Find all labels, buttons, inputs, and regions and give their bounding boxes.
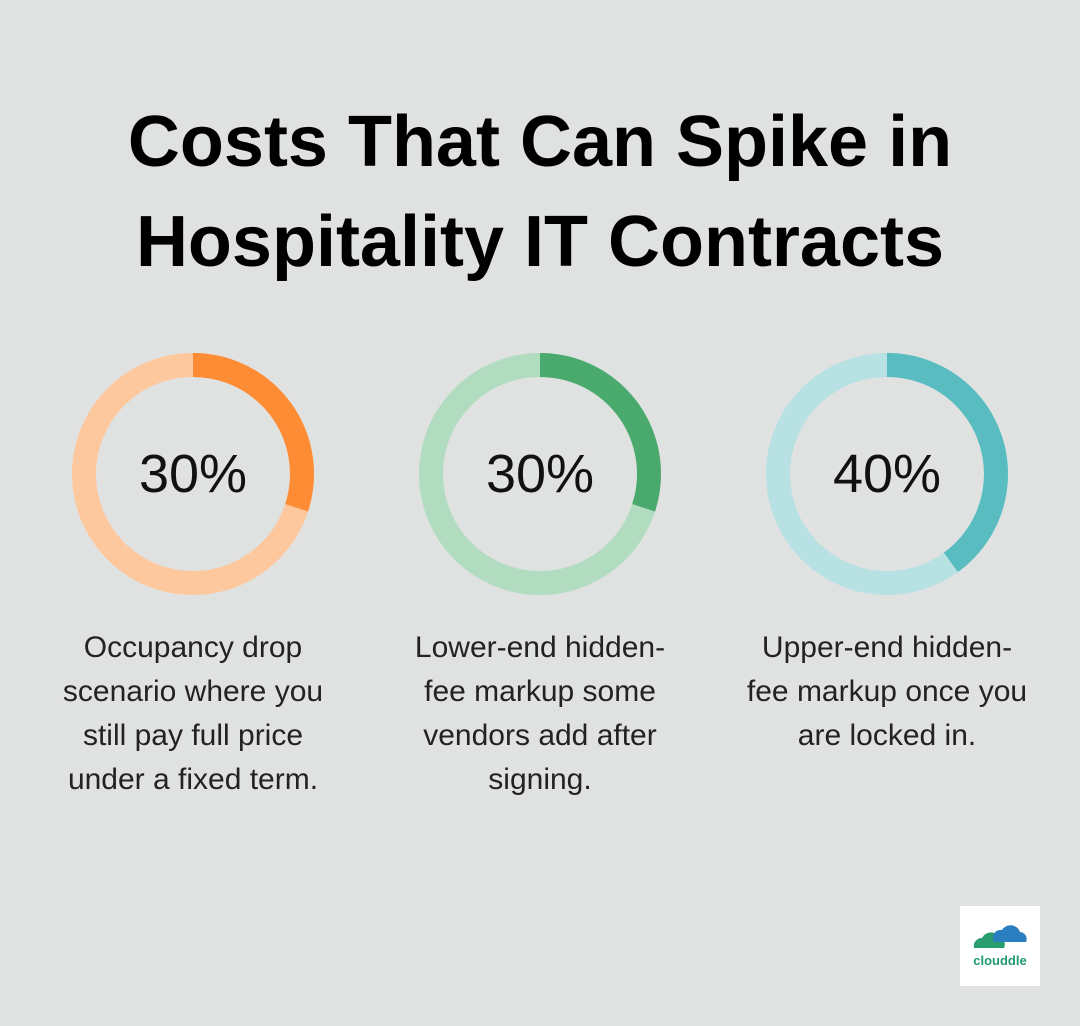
panel: lower-end markup: [415, 353, 665, 796]
text: occupancy description: Occupancy drop scenario where you still pay full price under a fixed term.: [63, 631, 323, 796]
text: lower-end description: Lower-end hidden-: [415, 631, 665, 664]
title: [128, 102, 952, 282]
donut chart 30% green: 30%: [486, 444, 594, 504]
logo: clouddle: clouddle: [973, 953, 1027, 968]
panel: occupancy drop: [63, 353, 323, 796]
panel: upper-end markup: [747, 353, 1027, 752]
donut chart 30% green: [419, 353, 661, 595]
title: Costs That Can Spike in: [128, 102, 952, 182]
donut chart 40% teal: [766, 353, 1008, 595]
text: lower-end description: fee markup some vendors add after signing.: [423, 675, 657, 796]
text: upper-end description: [747, 631, 1027, 752]
text: upper-end description: Upper-end hidden-: [762, 631, 1012, 664]
donut chart 30% orange: [72, 353, 314, 595]
text: lower-end description: [415, 631, 665, 796]
logo: clouddle: [960, 906, 1040, 986]
donut chart 40% teal: 40%: [833, 444, 941, 504]
text: upper-end description: fee markup once you are locked in.: [747, 675, 1027, 752]
donut chart 30% orange: 30%: [139, 444, 247, 504]
title: Hospitality IT Contracts: [136, 202, 944, 282]
